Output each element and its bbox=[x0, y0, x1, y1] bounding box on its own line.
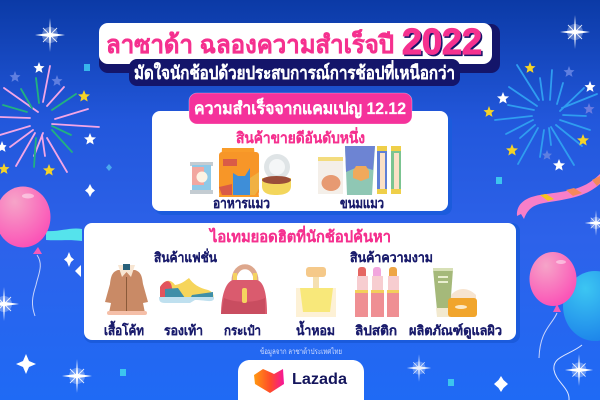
Lazada logo card bbox=[238, 360, 364, 400]
left pink firework bbox=[0, 66, 99, 172]
labels: fashion items: รองเท้า bbox=[164, 323, 203, 338]
balloon left pink bbox=[0, 186, 50, 316]
icon: coat bbox=[105, 264, 148, 315]
icon: handbag bbox=[221, 267, 267, 314]
label: cat treats: ขนมแมว bbox=[340, 195, 384, 211]
left firework stars bbox=[0, 62, 96, 176]
title banner bbox=[99, 21, 500, 73]
small diamonds and confetti bbox=[16, 64, 508, 392]
icon: cat treat sticks bbox=[377, 146, 401, 194]
subtitle banner bbox=[129, 59, 460, 86]
label: cat food: อาหารแมว bbox=[213, 195, 270, 211]
panel: best sellers bbox=[152, 111, 452, 215]
icon: skincare bbox=[433, 268, 477, 317]
icon: sneaker bbox=[159, 278, 214, 303]
campaign pill: ความสำเร็จจากแคมเปญ 12.12 bbox=[194, 96, 406, 119]
labels: beauty items: ลิปสติก bbox=[355, 323, 397, 338]
icon: cat treat pack bbox=[318, 157, 343, 194]
subheading: fashion: สินค้าแฟชั่น bbox=[154, 248, 217, 265]
ribbon right bbox=[517, 174, 600, 219]
labels: fashion items: เสื้อโค้ท bbox=[104, 320, 144, 338]
labels: fashion items bbox=[104, 320, 261, 338]
right firework stars bbox=[484, 62, 596, 170]
title text: ลาซาด้า ฉลองความสำเร็จปี bbox=[106, 29, 394, 59]
labels: beauty items: น้ำหอม bbox=[296, 320, 335, 338]
icon: Lazada heart bbox=[254, 369, 284, 393]
icon: perfume bbox=[296, 267, 336, 317]
labels: beauty items: ผลิตภัณฑ์ดูแลผิว bbox=[409, 323, 502, 339]
subheading: beauty: สินค้าความงาม bbox=[350, 250, 433, 265]
year 2022: 2022 bbox=[404, 22, 484, 64]
balloon right blue bbox=[554, 271, 600, 400]
balloon right pink bbox=[530, 252, 576, 358]
year 2022: 2022 bbox=[402, 21, 482, 62]
labels: fashion items: กระเป๋า bbox=[224, 323, 261, 338]
icon: canned cat food bbox=[190, 162, 213, 194]
icon: cat food bag bbox=[219, 148, 259, 197]
panel: trending items bbox=[84, 223, 520, 343]
heading: trending items: ไอเทมยอดฮิตที่นักช้อปค้นหา bbox=[208, 225, 391, 246]
source note: ข้อมูลจาก ลาซาด้าประเทศไทย bbox=[260, 347, 342, 357]
icon: open cat food can bbox=[262, 154, 291, 195]
ribbon left bbox=[46, 229, 82, 241]
labels: beauty items bbox=[296, 320, 502, 339]
heading: best sellers: สินค้าขายดีอันดับหนึ่ง bbox=[236, 127, 365, 147]
icon: lipsticks bbox=[355, 267, 399, 317]
subtitle banner: มัดใจนักช้อปด้วยประสบการณ์การช้อปที่เหนือกว่า bbox=[134, 60, 455, 83]
wordmark: Lazada bbox=[292, 371, 347, 388]
right blue firework bbox=[495, 65, 597, 165]
campaign pill bbox=[189, 93, 412, 124]
icon: cat treat pouch bbox=[345, 146, 375, 195]
